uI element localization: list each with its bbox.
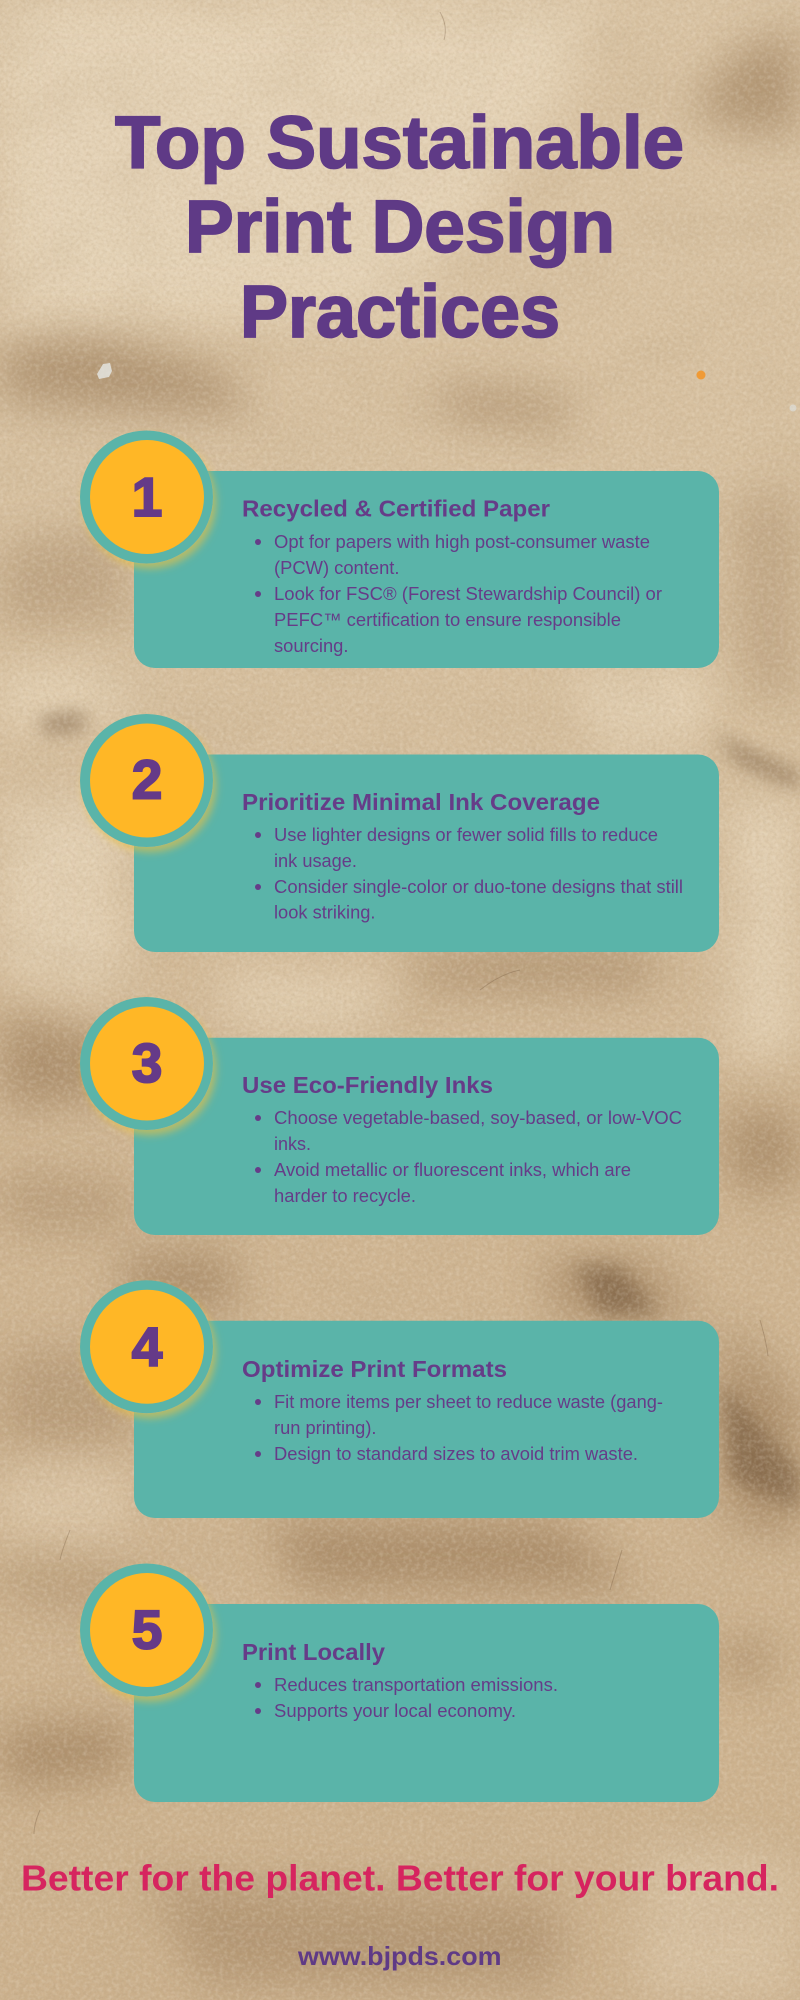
card background 2 — [134, 754, 719, 952]
bullet list 4: run printing). — [274, 1418, 376, 1438]
number badge 3: 3 — [132, 1032, 162, 1094]
number badge 2: 2 — [132, 748, 162, 810]
number badge 2 — [80, 714, 213, 847]
bullet list 1: Opt for papers with high post-consumer waste — [274, 532, 650, 552]
bullet list 1: Look for FSC® (Forest Stewardship Council) or — [274, 584, 662, 604]
heading 5: Print Locally — [242, 1639, 385, 1665]
bullet list 3: harder to recycle. — [274, 1186, 416, 1206]
number badge 5 — [80, 1564, 213, 1696]
panel: prioritize minimal ink coverage — [80, 714, 719, 952]
bullet list 3: inks. — [274, 1134, 311, 1154]
tagline: Better for the planet. Better for your brand. — [21, 1858, 779, 1898]
bullet list 2 — [255, 825, 683, 922]
panel: optimize print formats — [80, 1280, 719, 1518]
number badge 4: 4 — [132, 1316, 163, 1378]
bullet list 5: Reduces transportation emissions. — [274, 1675, 558, 1695]
card background 1 — [134, 471, 719, 668]
bullet list 4: Design to standard sizes to avoid trim waste. — [274, 1444, 638, 1464]
bullet list 3 — [255, 1108, 682, 1206]
title — [115, 101, 684, 353]
bullet list 1 — [255, 532, 662, 656]
card background 4 — [134, 1321, 719, 1518]
bullet list 2: Consider single-color or duo-tone designs that still — [274, 877, 683, 897]
number badge 1 — [80, 430, 213, 564]
title: Top Sustainable — [115, 101, 684, 184]
bullet list 4: Fit more items per sheet to reduce waste (gang- — [274, 1392, 663, 1412]
bullet list 1: sourcing. — [274, 636, 348, 656]
bullet list 2: ink usage. — [274, 851, 357, 871]
card background 5 — [134, 1604, 719, 1802]
bullet list 3: Choose vegetable-based, soy-based, or low-VOC — [274, 1108, 682, 1128]
bullet list 5: Supports your local economy. — [274, 1701, 516, 1721]
card background 3 — [134, 1038, 719, 1235]
heading 3: Use Eco-Friendly Inks — [242, 1072, 493, 1098]
number badge 5: 5 — [132, 1598, 162, 1660]
panel: recycled and certified paper — [80, 430, 719, 668]
heading 2: Prioritize Minimal Ink Coverage — [242, 789, 600, 815]
number badge 1: 1 — [132, 466, 162, 528]
panel: print locally — [80, 1564, 719, 1802]
bullet list 1: (PCW) content. — [274, 558, 400, 578]
heading 1: Recycled & Certified Paper — [242, 496, 550, 522]
title: Practices — [240, 270, 560, 353]
title: Print Design — [185, 185, 615, 268]
bullet list 2: Use lighter designs or fewer solid fills to reduce — [274, 825, 658, 845]
panel: use eco-friendly inks — [80, 997, 719, 1235]
heading 4: Optimize Print Formats — [242, 1356, 507, 1382]
bullet list 5 — [255, 1675, 558, 1721]
bullet list 2: look striking. — [274, 902, 376, 922]
number badge 4 — [80, 1280, 213, 1413]
bullet list 4 — [255, 1392, 663, 1464]
bullet list 3: Avoid metallic or fluorescent inks, which are — [274, 1160, 631, 1180]
website url: www.bjpds.com — [297, 1941, 502, 1971]
number badge 3 — [80, 997, 213, 1130]
bullet list 1: PEFC™ certification to ensure responsible — [274, 610, 621, 630]
